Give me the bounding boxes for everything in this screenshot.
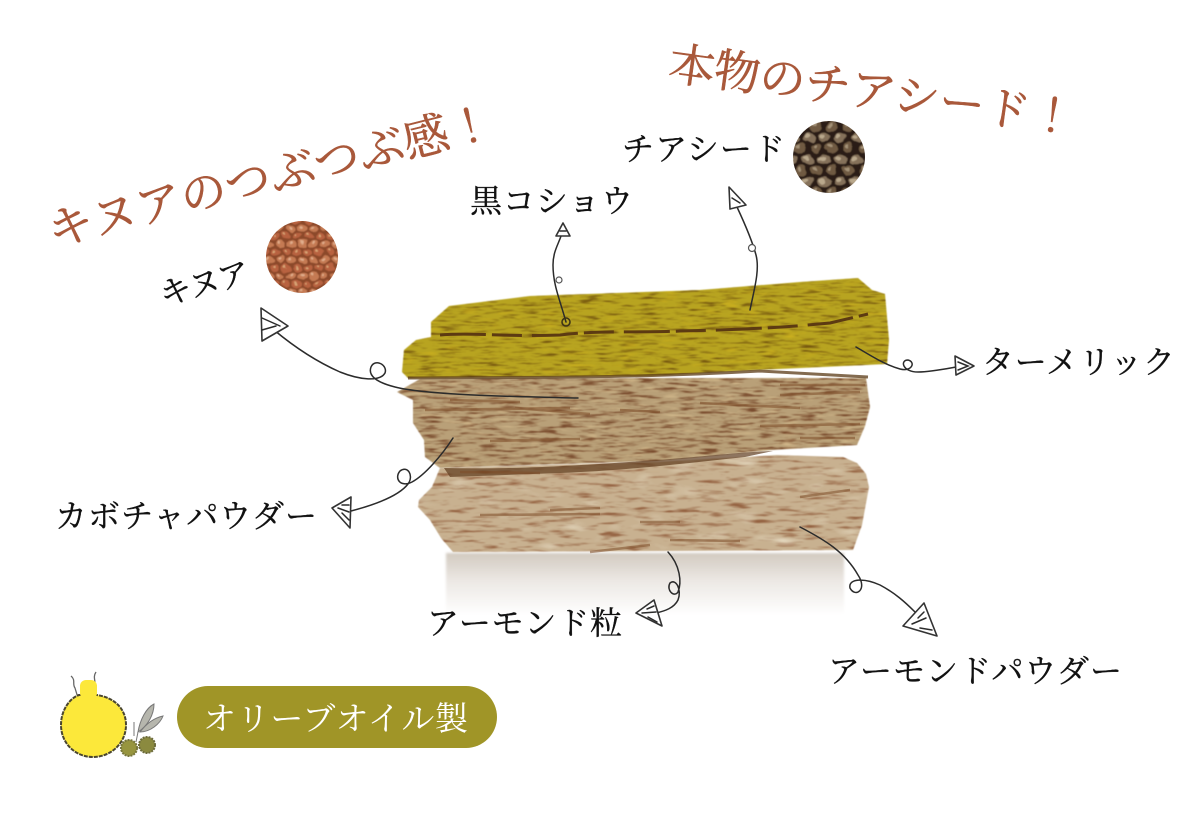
arrow head bbox=[332, 497, 351, 528]
label: アーモンド粒 bbox=[427, 605, 622, 641]
badge pill bbox=[177, 686, 497, 748]
badge: made with olive oil bbox=[177, 686, 497, 748]
olive leaves bbox=[134, 704, 163, 742]
arrow line bbox=[553, 236, 566, 322]
arrow head bbox=[903, 603, 937, 636]
callout: almond powder bbox=[800, 527, 1122, 689]
wafer gap shadows bbox=[444, 451, 773, 477]
turmeric layer line bbox=[440, 314, 868, 335]
label: アーモンドパウダー bbox=[828, 653, 1122, 689]
loop marker bbox=[556, 277, 562, 283]
reflection below product bbox=[446, 553, 844, 615]
callout: turmeric bbox=[856, 344, 1175, 380]
arrow head bbox=[556, 223, 570, 236]
shadow under turmeric wafer bbox=[408, 371, 868, 378]
arrow line bbox=[351, 438, 453, 511]
arrow line bbox=[856, 347, 956, 372]
arrow line bbox=[274, 330, 578, 398]
callout: black pepper bbox=[470, 183, 633, 326]
seed swatch: quinoa bbox=[266, 221, 338, 293]
flask squiggles bbox=[71, 672, 96, 698]
label: ターメリック bbox=[982, 344, 1175, 380]
pepper dot bbox=[562, 318, 570, 326]
headline: real chia seeds: 本物のチアシード！ bbox=[666, 38, 1079, 145]
arrow head bbox=[261, 308, 288, 341]
arrow head bbox=[636, 600, 662, 626]
seed swatch: chia bbox=[793, 121, 865, 193]
headline: quinoa texture: キヌアのつぶつぶ感！ bbox=[42, 96, 499, 257]
middle pumpkin wafer bbox=[397, 378, 870, 468]
olive: left bbox=[121, 740, 137, 756]
arrow line bbox=[656, 552, 680, 613]
product: stacked wafers bbox=[397, 278, 889, 552]
callout: chia seed bbox=[622, 117, 869, 310]
flask neck bbox=[80, 680, 97, 699]
arrow line bbox=[737, 207, 757, 310]
label: カボチャパウダー bbox=[55, 498, 317, 534]
flask body bbox=[61, 695, 126, 757]
loop marker bbox=[748, 244, 756, 252]
arrow line bbox=[800, 527, 915, 612]
label: キヌア bbox=[155, 254, 254, 313]
bottom almond wafer bbox=[418, 455, 869, 552]
arrow head bbox=[729, 187, 746, 209]
label: チアシード bbox=[622, 131, 785, 167]
label: 黒コショウ bbox=[470, 183, 633, 219]
callout: almond grain bbox=[427, 552, 680, 641]
badge text: オリーブオイル製 bbox=[203, 701, 468, 738]
icon: olive oil flask bbox=[61, 672, 163, 757]
olive: right bbox=[139, 737, 155, 753]
top turmeric wafer bbox=[402, 278, 889, 378]
callout: pumpkin powder bbox=[55, 438, 453, 534]
wafer streaks bbox=[425, 385, 865, 552]
callout: quinoa bbox=[155, 217, 578, 398]
arrow head bbox=[955, 356, 974, 375]
